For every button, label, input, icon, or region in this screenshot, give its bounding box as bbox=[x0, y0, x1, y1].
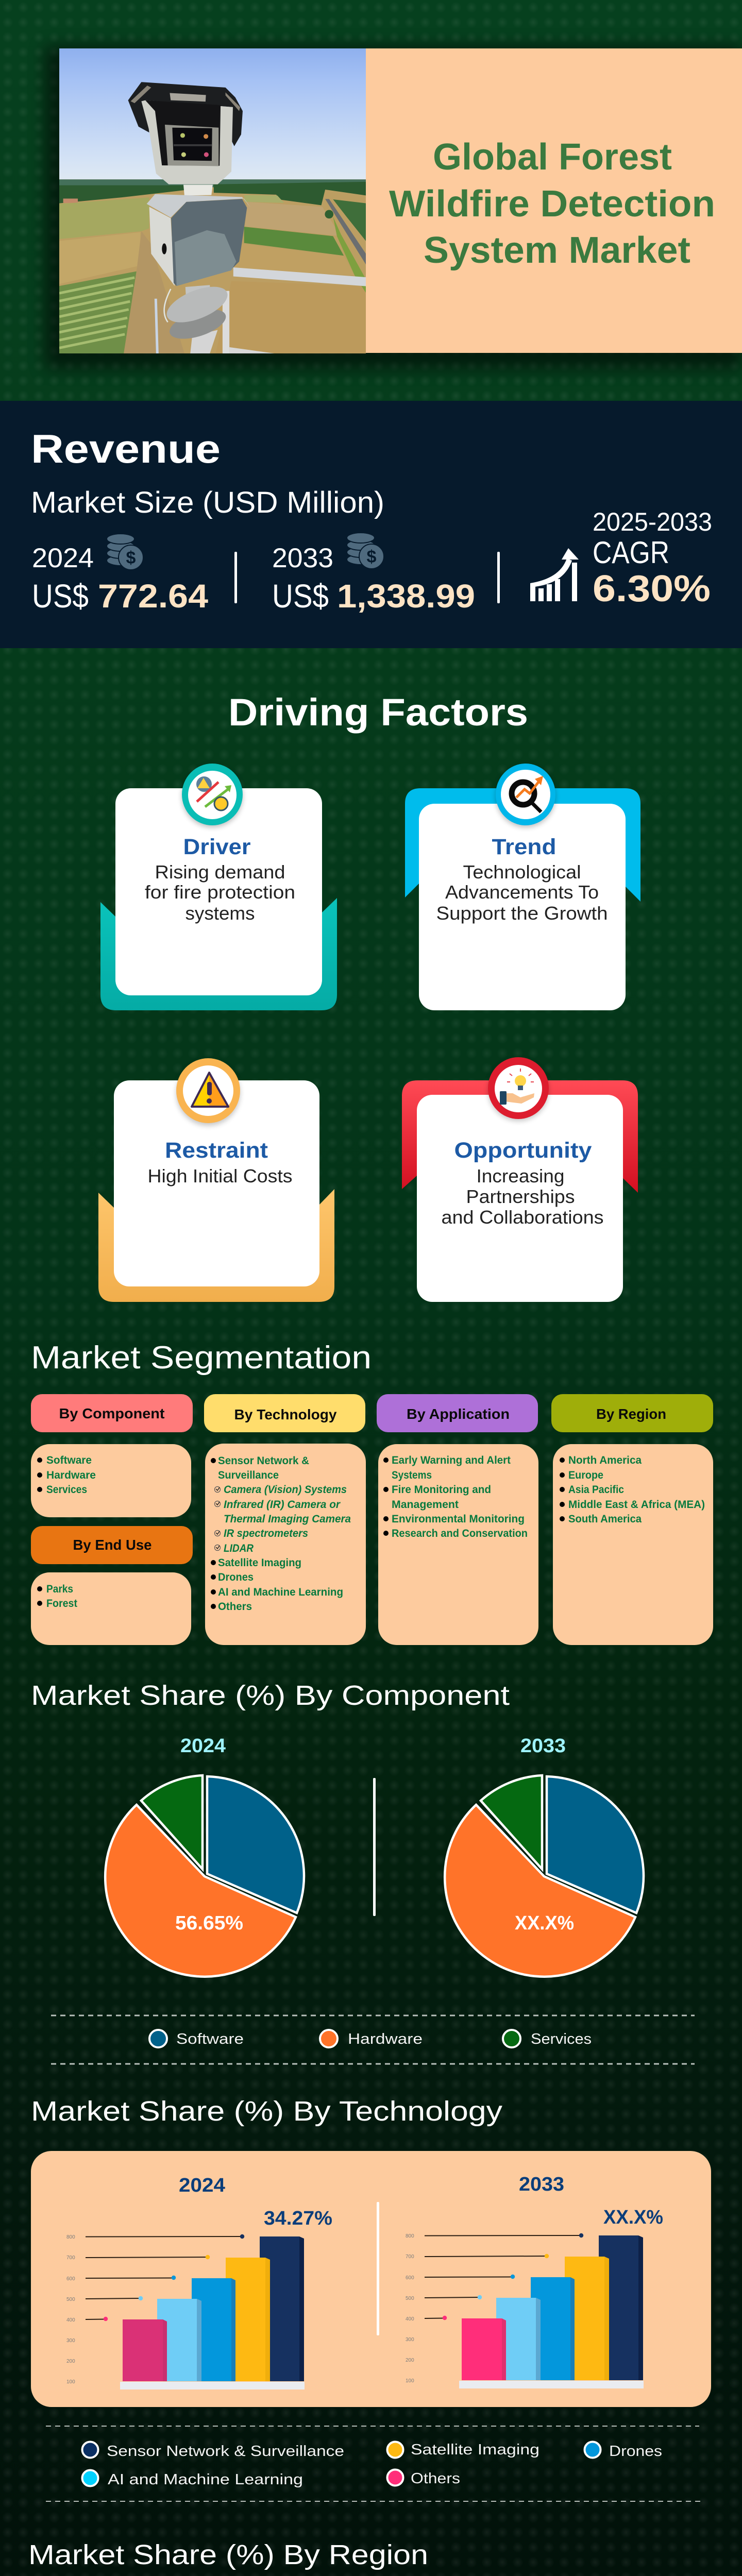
legend: component: Services bbox=[531, 2031, 592, 2047]
legend: technology: Drones bbox=[609, 2443, 662, 2460]
bar chart 2024: 500 bbox=[66, 2297, 75, 2302]
technology panel bbox=[31, 2151, 711, 2407]
2033 value: 1,338.99 bbox=[337, 578, 475, 615]
bar chart 2033: 800 bbox=[406, 2233, 414, 2239]
segmentation: by application: By Application bbox=[407, 1406, 510, 1422]
bar chart 2024: 2024 bbox=[179, 2175, 225, 2196]
opportunity text: Increasing bbox=[476, 1165, 565, 1187]
card: trend bbox=[405, 764, 640, 1010]
segmentation: by component: By Component bbox=[59, 1405, 165, 1421]
2033 value: US$ bbox=[272, 578, 329, 615]
segmentation: by technology: LIDAR bbox=[224, 1543, 254, 1554]
segmentation: by component bbox=[31, 1394, 193, 1517]
heading: share by technology: Market Share (%) By Technology bbox=[31, 2096, 502, 2127]
segmentation: by technology: Camera (Vision) Systems bbox=[224, 1484, 347, 1496]
restraint heading: Restraint bbox=[165, 1138, 268, 1163]
segmentation: by component: Services bbox=[46, 1484, 87, 1496]
pie chart 2024 bbox=[105, 1735, 304, 1977]
legend: component bbox=[149, 2030, 592, 2047]
heading: market segmentation: Market Segmentation bbox=[31, 1340, 372, 1376]
icon: coins 2033: $ bbox=[367, 547, 377, 567]
segmentation: by technology bbox=[204, 1394, 366, 1645]
bar chart 2033: 200 bbox=[406, 2358, 414, 2363]
legend: component: Software bbox=[176, 2031, 244, 2047]
2033 value bbox=[272, 543, 475, 615]
heading: share by component: Market Share (%) By Component bbox=[31, 1680, 510, 1711]
pie chart 2033: XX.X% bbox=[515, 1912, 574, 1934]
CAGR block bbox=[593, 507, 712, 609]
trend text: Technological bbox=[463, 861, 581, 883]
pie chart 2024: 56.65% bbox=[175, 1912, 243, 1934]
segmentation: by region: Middle East & Africa (MEA) bbox=[568, 1499, 705, 1511]
2024 value bbox=[32, 543, 208, 615]
hero panel bbox=[59, 48, 742, 353]
segmentation: by region: By Region bbox=[596, 1406, 666, 1422]
segmentation: by end use: Parks bbox=[46, 1583, 73, 1595]
trend text bbox=[436, 861, 608, 924]
trend text: Advancements To bbox=[445, 882, 599, 903]
pie chart 2024: 2024 bbox=[180, 1735, 226, 1757]
divider bbox=[497, 552, 500, 603]
trend text: Support the Growth bbox=[436, 903, 608, 924]
segmentation: by application: Systems bbox=[392, 1469, 432, 1481]
driver text: Rising demand bbox=[155, 861, 285, 883]
opportunity heading: Opportunity bbox=[454, 1138, 592, 1163]
segmentation: by technology: Surveillance bbox=[218, 1469, 279, 1481]
2024 value: US$ bbox=[32, 578, 89, 615]
divider bbox=[377, 2202, 379, 2335]
divider bbox=[373, 1778, 376, 1916]
title bbox=[389, 137, 715, 271]
restraint text: High Initial Costs bbox=[147, 1165, 293, 1187]
pie chart 2033 bbox=[445, 1735, 644, 1977]
legend: technology: Sensor Network & Surveillance bbox=[107, 2443, 344, 2460]
segmentation: by technology: Infrared (IR) Camera or bbox=[224, 1499, 341, 1511]
card: restraint bbox=[98, 1058, 334, 1302]
legend: technology: Satellite Imaging bbox=[411, 2442, 539, 2458]
bar chart 2024 bbox=[66, 2175, 332, 2389]
bar chart 2024: 34.27% bbox=[264, 2208, 332, 2229]
CAGR block: CAGR bbox=[593, 535, 669, 570]
legend: technology: Others bbox=[411, 2470, 460, 2487]
icon: coins 2033 bbox=[347, 533, 384, 569]
bar chart 2024: 200 bbox=[66, 2359, 75, 2364]
segmentation: by application bbox=[377, 1394, 538, 1645]
icon: coins 2024 bbox=[107, 534, 143, 570]
title: Wildfire Detection bbox=[389, 183, 715, 225]
2024 value: 772.64 bbox=[98, 578, 208, 615]
segmentation: by application: Environmental Monitoring bbox=[392, 1513, 525, 1525]
segmentation: by application: Fire Monitoring and bbox=[392, 1484, 491, 1496]
bar chart 2033: 300 bbox=[406, 2337, 414, 2343]
title: Global Forest bbox=[433, 137, 672, 178]
CAGR block: 6.30% bbox=[593, 568, 711, 609]
hero photo: camera over fields bbox=[59, 48, 366, 353]
icon: driver gears and arrows bbox=[182, 764, 243, 827]
segmentation: by end use: Forest bbox=[46, 1598, 77, 1609]
opportunity text bbox=[441, 1165, 604, 1228]
segmentation: by end use: By End Use bbox=[73, 1537, 151, 1553]
bar chart 2033 bbox=[406, 2174, 663, 2388]
market size subheading: Market Size (USD Million) bbox=[31, 486, 384, 519]
bar chart 2033: XX.X% bbox=[603, 2207, 663, 2228]
bar chart 2024: 800 bbox=[66, 2234, 75, 2240]
bar chart 2024: 300 bbox=[66, 2338, 75, 2344]
bar chart 2024: 400 bbox=[66, 2317, 75, 2323]
opportunity text: and Collaborations bbox=[441, 1207, 604, 1228]
segmentation: by technology: Sensor Network & bbox=[218, 1455, 309, 1467]
segmentation: by region: North America bbox=[568, 1454, 642, 1466]
opportunity text: Partnerships bbox=[466, 1186, 575, 1207]
heading: driving factors: Driving Factors bbox=[228, 691, 528, 734]
bar chart 2024: 700 bbox=[66, 2255, 75, 2261]
icon: warning triangle bbox=[176, 1058, 240, 1126]
segmentation: by application: Research and Conservation bbox=[392, 1528, 528, 1539]
segmentation: by component: Software bbox=[46, 1454, 92, 1466]
bar chart 2033: 600 bbox=[406, 2275, 414, 2281]
title: System Market bbox=[424, 230, 690, 271]
segmentation: by technology: By Technology bbox=[234, 1406, 337, 1422]
segmentation: by application: Early Warning and Alert bbox=[392, 1454, 511, 1466]
revenue heading: Revenue bbox=[31, 426, 221, 471]
card: driver bbox=[100, 764, 337, 1010]
segmentation: by component: Hardware bbox=[46, 1469, 96, 1481]
2024 value: 2024 bbox=[32, 543, 94, 573]
segmentation: by technology: Thermal Imaging Camera bbox=[224, 1513, 351, 1525]
driver text: systems bbox=[185, 903, 255, 924]
segmentation: by region: South America bbox=[568, 1513, 642, 1525]
bar chart 2033: 400 bbox=[406, 2316, 414, 2322]
driver text bbox=[145, 861, 295, 924]
trend heading: Trend bbox=[492, 835, 556, 859]
segmentation: by technology: Others bbox=[218, 1601, 252, 1613]
title panel bbox=[366, 48, 742, 353]
segmentation: by region: Asia Pacific bbox=[568, 1484, 624, 1496]
driver text: for fire protection bbox=[145, 882, 295, 903]
legend: component: Hardware bbox=[348, 2031, 423, 2047]
segmentation: by application: Management bbox=[392, 1499, 459, 1511]
2033 value: 2033 bbox=[272, 543, 333, 573]
segmentation: by technology: Drones bbox=[218, 1571, 254, 1583]
segmentation: by technology: AI and Machine Learning bbox=[218, 1586, 343, 1598]
segmentation: by region: Europe bbox=[568, 1469, 603, 1481]
icon: growth arrow bbox=[530, 548, 579, 601]
bar chart 2033: 2033 bbox=[519, 2174, 564, 2195]
legend: technology bbox=[82, 2442, 662, 2488]
bar chart 2033: 100 bbox=[406, 2378, 414, 2384]
CAGR block: 2025-2033 bbox=[593, 507, 712, 536]
segmentation: by technology: IR spectrometers bbox=[224, 1528, 308, 1539]
driver heading: Driver bbox=[183, 835, 251, 859]
segmentation: by region bbox=[551, 1394, 713, 1645]
bar chart 2024: 100 bbox=[66, 2379, 75, 2385]
icon: coins 2024: $ bbox=[126, 548, 136, 568]
revenue band bbox=[0, 401, 742, 648]
bar chart 2033: 500 bbox=[406, 2296, 414, 2301]
segmentation: by end use bbox=[31, 1526, 193, 1645]
legend: technology: AI and Machine Learning bbox=[108, 2471, 303, 2488]
icon: trend magnifier bbox=[496, 764, 555, 827]
heading: share by region: Market Share (%) By Region bbox=[28, 2539, 428, 2570]
divider bbox=[234, 552, 237, 603]
bar chart 2033: 700 bbox=[406, 2254, 414, 2260]
card: opportunity bbox=[402, 1057, 638, 1302]
bar chart 2024: 600 bbox=[66, 2276, 75, 2282]
pie chart 2033: 2033 bbox=[520, 1735, 566, 1757]
icon: hand and lightbulb bbox=[488, 1057, 549, 1121]
segmentation: by technology: Satellite Imaging bbox=[218, 1557, 301, 1569]
